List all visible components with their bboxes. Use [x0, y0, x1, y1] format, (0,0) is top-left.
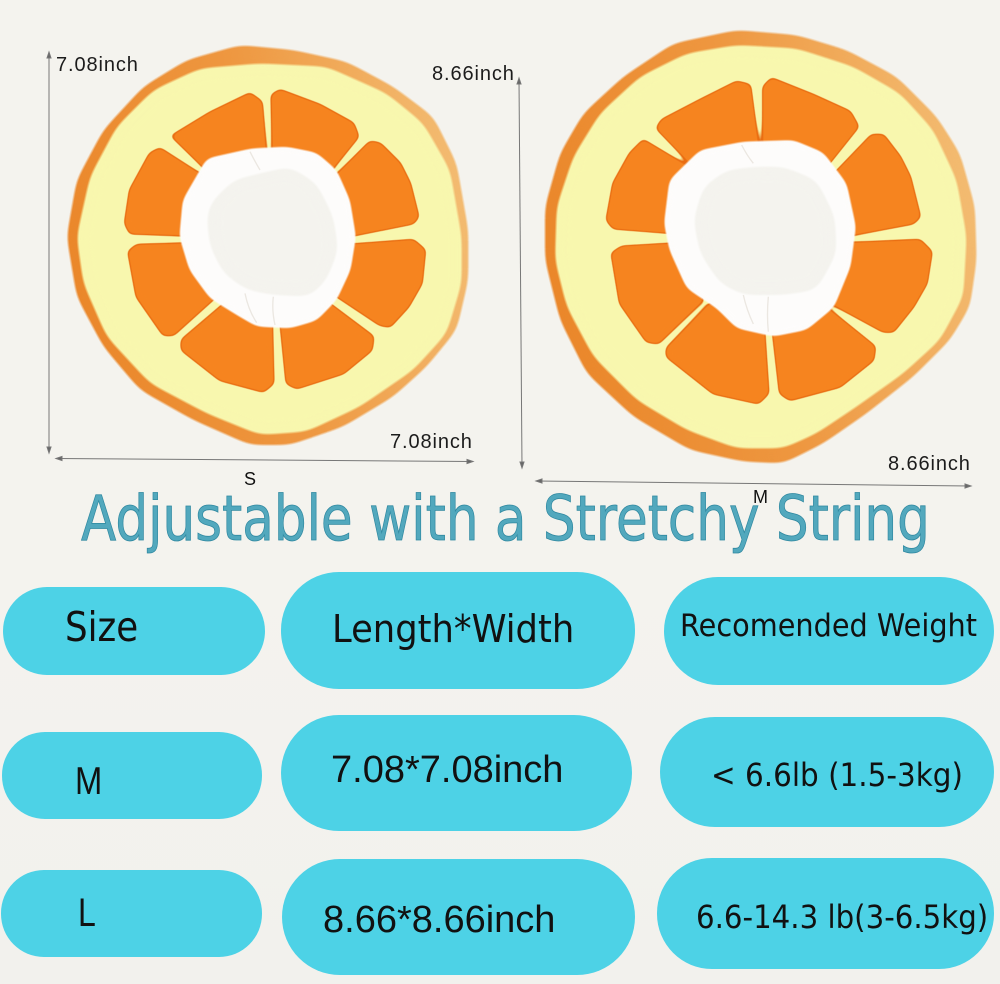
size label S: S — [244, 469, 256, 489]
table header: size — [3, 587, 265, 675]
table header: size: Size — [65, 603, 138, 651]
product: medium orange collar M — [545, 30, 977, 463]
row L: size: L — [78, 891, 96, 935]
row L: dimensions: 8.66*8.66inch — [323, 899, 555, 941]
dimension arrows — [47, 52, 971, 488]
row M: weight: < 6.6lb (1.5-3kg) — [711, 756, 963, 794]
row M: dimensions: 7.08*7.08inch — [331, 749, 563, 791]
dimension label: S width: 7.08inch — [390, 431, 473, 453]
table header: recommended weight: Recomended Weight — [680, 608, 977, 644]
dimension label: M width: 8.66inch — [888, 453, 971, 475]
product: small orange collar S — [67, 45, 468, 445]
title: Adjustable with a Stretchy String — [81, 482, 930, 555]
dimension label: S height: 7.08inch — [56, 54, 139, 76]
row L: dimensions — [282, 859, 635, 975]
table header: recommended weight — [664, 577, 994, 685]
row L: weight — [657, 858, 994, 969]
row M: size — [2, 732, 262, 819]
table header: length width — [281, 572, 635, 689]
size label M: M — [753, 487, 768, 507]
row M: size: M — [75, 760, 102, 803]
dimension label: M height: 8.66inch — [432, 63, 515, 85]
row M: dimensions — [281, 715, 632, 831]
row L: weight: 6.6-14.3 lb(3-6.5kg) — [696, 898, 988, 936]
table header: length width: Length*Width — [332, 607, 574, 651]
row M: weight — [660, 717, 994, 827]
row L: size — [1, 870, 262, 957]
